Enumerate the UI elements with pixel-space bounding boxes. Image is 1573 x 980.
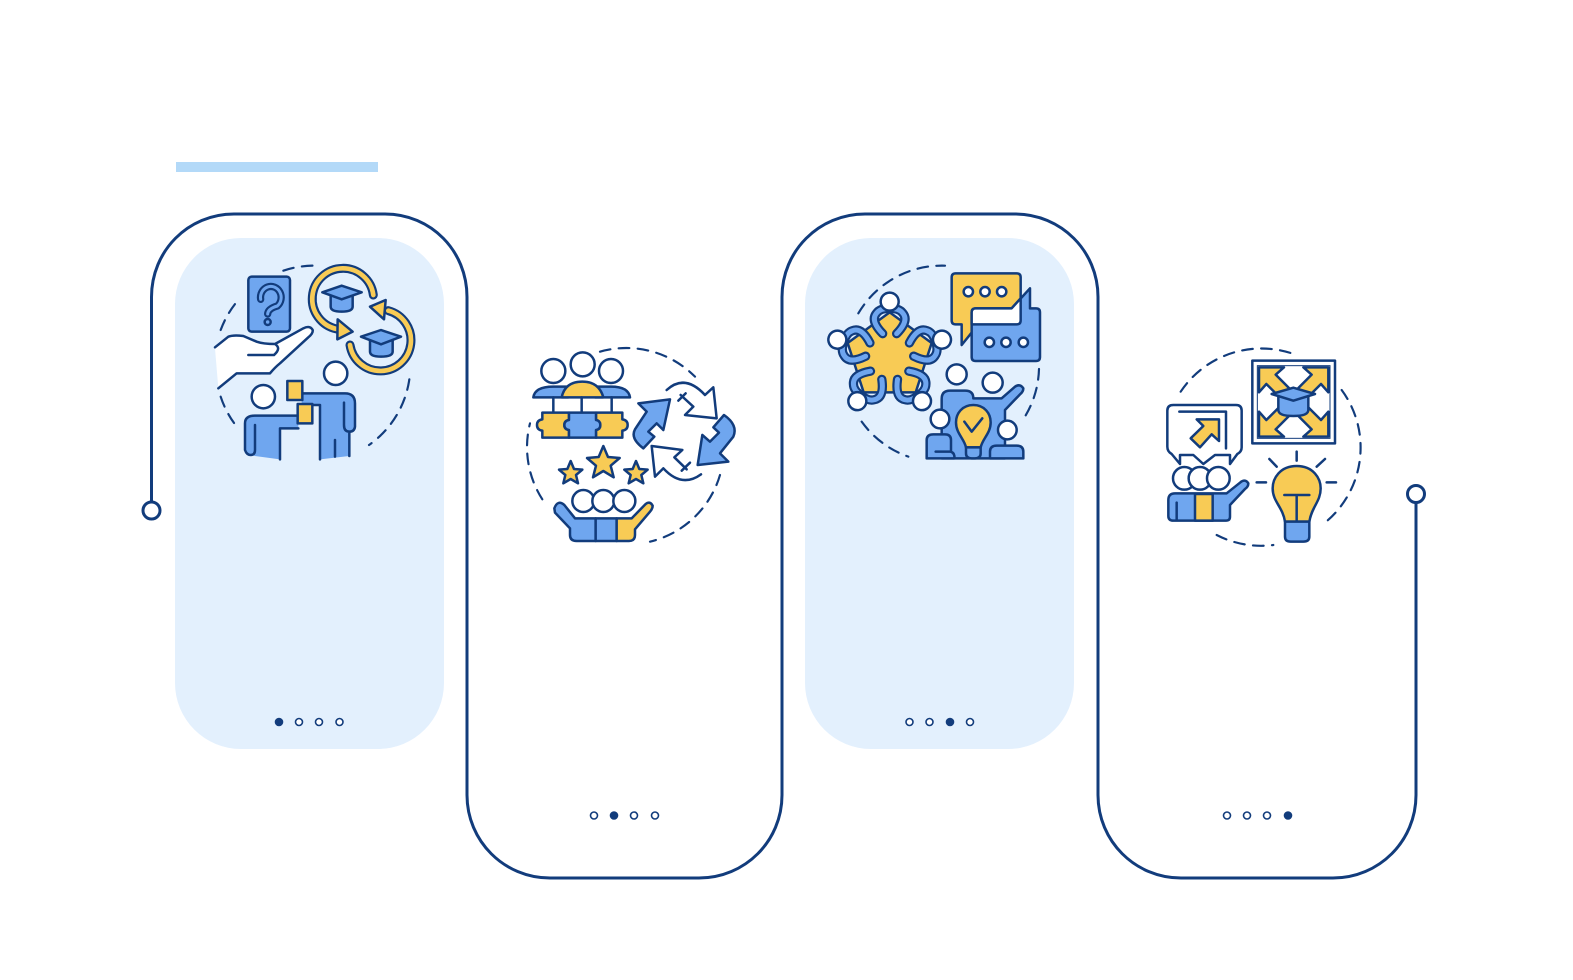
winding outline connecting the four steps — [152, 214, 1416, 878]
sub-element: team of three — [1168, 467, 1248, 521]
panel: step 1 background — [175, 238, 444, 749]
icon: step 4 scaling knowledge — [1167, 348, 1361, 546]
icon: step 1 knowledge exchange — [215, 266, 411, 459]
pagination: step 1 — [276, 718, 343, 726]
end marker — [1408, 486, 1424, 502]
sub-element: speech bubble with growth arrow — [1167, 405, 1242, 464]
start marker — [143, 502, 160, 519]
pagination: step 3 — [906, 718, 974, 726]
sub-element: light bulb — [1257, 452, 1336, 542]
sub-element: team with light bulb — [927, 364, 1023, 458]
panel: step 3 background — [805, 238, 1074, 749]
icon: step 2 teamwork and feedback — [527, 348, 735, 542]
icon: step 3 collaboration and ideas — [824, 266, 1040, 458]
heading placeholder bar — [176, 162, 378, 172]
sub-element: speech bubbles — [952, 273, 1040, 361]
sub-element: framed graduation cap with arrows — [1252, 361, 1335, 443]
sub-element: circle of people — [824, 293, 955, 417]
pagination: step 4 — [1224, 812, 1292, 819]
pagination: step 2 — [590, 812, 658, 819]
